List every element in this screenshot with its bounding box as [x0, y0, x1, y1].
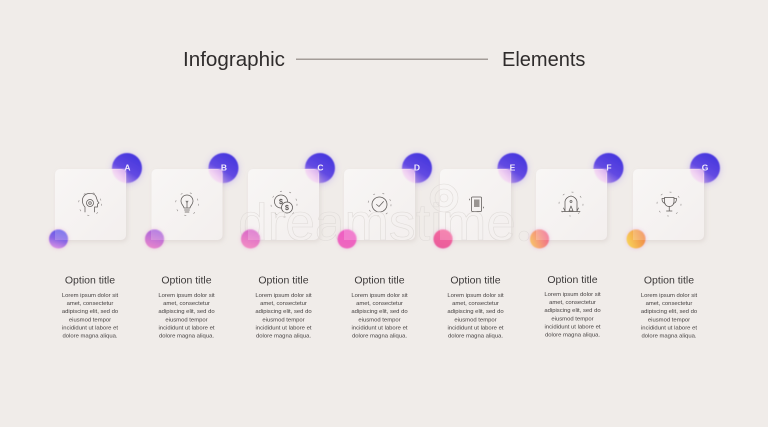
- option text A: eiusmod tempor: [69, 317, 111, 323]
- option text C: [255, 274, 312, 340]
- step E card: E: [510, 162, 516, 172]
- option text D: Option title: [354, 274, 405, 286]
- option text E: dolore magna aliqua.: [448, 334, 503, 340]
- option text C: amet, consectetur: [260, 301, 307, 307]
- step G card: [633, 153, 720, 240]
- step A card: [49, 153, 142, 248]
- option text G: dolore magna aliqua.: [641, 334, 697, 340]
- icon: coins: $: [285, 205, 289, 212]
- option text G: [641, 274, 698, 340]
- option text B: Option title: [161, 274, 212, 286]
- option text F: incididunt ut labore et: [544, 324, 601, 330]
- step D card: D: [414, 162, 420, 172]
- icon: coins: $: [279, 199, 283, 206]
- icon: coins: [271, 191, 297, 217]
- option text D: amet, consectetur: [356, 301, 403, 307]
- option text G: amet, consectetur: [646, 301, 692, 307]
- icon: head with target: [78, 192, 102, 216]
- option text G: Lorem ipsum dolor sit: [641, 293, 698, 299]
- step C card: [248, 153, 335, 240]
- option text C: Option title: [258, 274, 309, 286]
- option text A: Lorem ipsum dolor sit: [62, 293, 119, 299]
- option text A: Option title: [65, 274, 115, 286]
- icon: tablet: [470, 197, 484, 212]
- small gradient circles over watermark: [241, 230, 646, 248]
- step F card: F: [606, 162, 612, 172]
- option text E: eiusmod tempor: [454, 317, 497, 323]
- option text E: Option title: [450, 274, 501, 286]
- option text G: adipiscing elit, sed do: [641, 309, 698, 315]
- option text A: amet, consectetur: [67, 301, 113, 307]
- option text C: eiusmod tempor: [262, 317, 305, 323]
- option text C: incididunt ut labore et: [256, 325, 312, 331]
- option text A: adipiscing elit, sed do: [62, 309, 119, 315]
- option text G: incididunt ut labore et: [641, 325, 697, 331]
- option text D: dolore magna aliqua.: [352, 334, 407, 340]
- option text B: eiusmod tempor: [165, 317, 208, 323]
- step A card: A: [124, 162, 131, 172]
- icon: rocket: [559, 192, 583, 216]
- option text F: Lorem ipsum dolor sit: [544, 292, 601, 298]
- option text B: dolore magna aliqua.: [159, 334, 214, 340]
- option text F: adipiscing elit, sed do: [544, 308, 601, 314]
- option text F: dolore magna aliqua.: [545, 332, 600, 338]
- option text E: adipiscing elit, sed do: [447, 309, 504, 315]
- icon: light bulb: [176, 192, 198, 216]
- option text B: [158, 274, 215, 340]
- step G card: G: [702, 162, 709, 172]
- step D card: [344, 153, 432, 240]
- title: Infographic: [183, 49, 285, 71]
- title: [183, 49, 585, 71]
- option text A: dolore magna aliqua.: [62, 334, 118, 340]
- option text A: incididunt ut labore et: [62, 325, 118, 331]
- option text A: [62, 274, 119, 340]
- icon: trophy: [657, 192, 681, 216]
- title: Elements: [502, 49, 585, 71]
- option text F: amet, consectetur: [549, 300, 596, 306]
- option text E: amet, consectetur: [452, 301, 499, 307]
- option text D: Lorem ipsum dolor sit: [351, 293, 408, 299]
- option text C: adipiscing elit, sed do: [255, 309, 312, 315]
- option text F: Option title: [547, 274, 598, 286]
- step F card: [536, 153, 624, 240]
- option text F: eiusmod tempor: [551, 316, 594, 322]
- option text B: incididunt ut labore et: [158, 325, 215, 331]
- watermark: dreamstime: [238, 194, 516, 252]
- option text D: adipiscing elit, sed do: [351, 309, 408, 315]
- option text G: eiusmod tempor: [648, 317, 690, 323]
- step B card: B: [221, 162, 227, 172]
- option text B: Lorem ipsum dolor sit: [158, 293, 215, 299]
- option text B: adipiscing elit, sed do: [158, 309, 215, 315]
- option text G: Option title: [644, 274, 694, 286]
- icon: clock: [368, 193, 391, 216]
- option text E: incididunt ut labore et: [448, 325, 504, 331]
- option text D: incididunt ut labore et: [352, 325, 408, 331]
- step B card: [145, 153, 238, 248]
- option text C: dolore magna aliqua.: [256, 334, 311, 340]
- option text F: [544, 274, 601, 338]
- option text C: Lorem ipsum dolor sit: [255, 293, 312, 299]
- option text D: eiusmod tempor: [358, 317, 401, 323]
- step E card: [440, 153, 528, 240]
- step C card: C: [317, 162, 324, 172]
- option text B: amet, consectetur: [163, 301, 210, 307]
- option text E: [447, 274, 504, 340]
- option text D: [351, 274, 408, 340]
- option text E: Lorem ipsum dolor sit: [447, 293, 504, 299]
